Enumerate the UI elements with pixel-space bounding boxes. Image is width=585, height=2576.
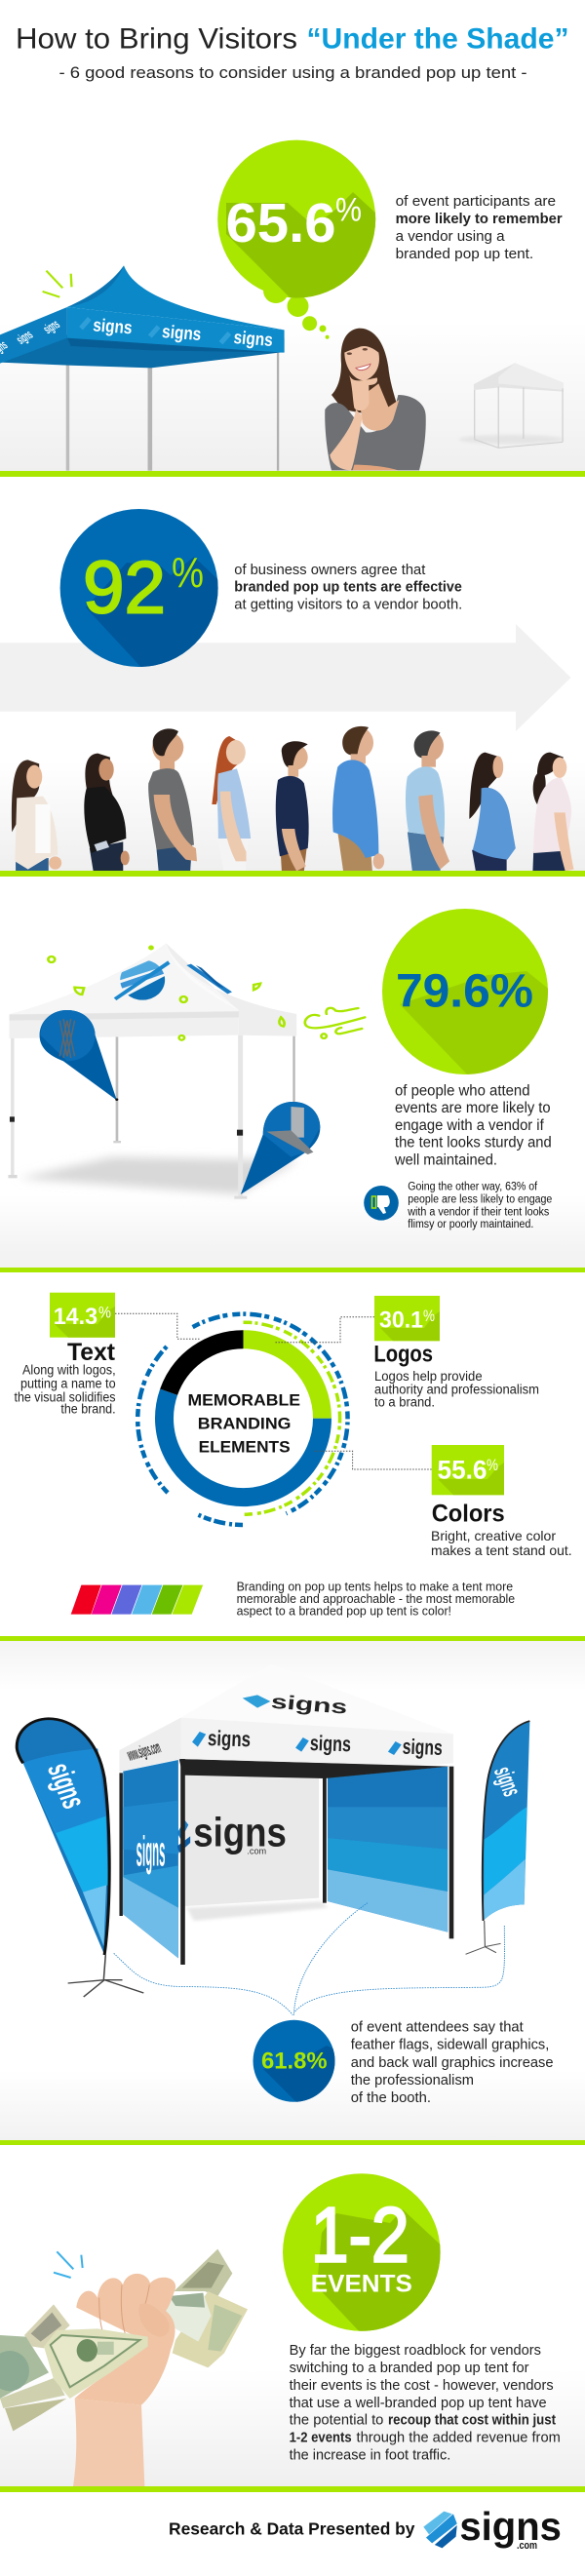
stat description: the tent looks sturdy and xyxy=(395,1135,552,1151)
stat bubble: 65.6%: % xyxy=(335,191,362,228)
stat description: of event attendees say that xyxy=(351,2018,525,2035)
callout: text xyxy=(14,1293,116,1416)
feather flag left: signs xyxy=(40,1759,94,1813)
title: “Under the Shade” xyxy=(306,23,569,55)
tent logos: signs xyxy=(92,316,134,338)
tent logos xyxy=(0,316,274,358)
stat description xyxy=(396,193,563,262)
falling leaves xyxy=(48,947,327,1040)
stat circle: 1-2 events: EVENTS xyxy=(311,2271,412,2298)
callout: text: the brand. xyxy=(60,1401,116,1416)
callout: text: Text xyxy=(67,1339,116,1366)
person 6 xyxy=(332,726,384,871)
footer credit xyxy=(169,2505,562,2552)
callout: colors: Colors xyxy=(432,1501,505,1528)
donut centre label: MEMORABLE xyxy=(187,1391,300,1410)
dotted leader lines xyxy=(115,1313,432,1469)
stat circle: 1-2 events: 1-2 xyxy=(311,2191,410,2278)
stat bubble: 65.6% xyxy=(217,140,390,339)
stat description: well maintained. xyxy=(394,1151,497,1168)
stat description: of event participants are xyxy=(396,193,556,210)
tent poles xyxy=(119,1759,453,1965)
tent logos: signs xyxy=(161,322,202,345)
divider xyxy=(0,871,585,877)
branding summary xyxy=(237,1580,515,1619)
stat description: of people who attend xyxy=(395,1082,530,1099)
branded tent with walls: signs xyxy=(136,1827,166,1875)
stat bubble: 65.6%: 65.6 xyxy=(226,192,335,254)
person 7 xyxy=(406,730,449,871)
canopy: signs xyxy=(208,1727,251,1752)
callout: colors: % xyxy=(487,1456,498,1474)
cost paragraph: the potential to xyxy=(290,2412,383,2429)
note: going the other way xyxy=(407,1182,552,1230)
cost paragraph: recoup that cost within just xyxy=(388,2412,556,2429)
donut centre label xyxy=(187,1391,300,1457)
back wall logo: signs xyxy=(193,1809,287,1855)
note: going the other way: with a vendor if their tent looks xyxy=(407,1206,550,1218)
cost paragraph: 1-2 events xyxy=(290,2429,352,2445)
callout: logos xyxy=(373,1296,539,1409)
footer credit: Research & Data Presented by xyxy=(169,2518,415,2538)
donut centre label: BRANDING xyxy=(198,1415,291,1433)
panel: 61.8% professionalism xyxy=(17,1664,554,2106)
pin: frame detail xyxy=(40,1010,118,1101)
queue of people xyxy=(12,726,574,871)
feather flag right xyxy=(466,1721,529,1954)
icon: thumbs down xyxy=(364,1186,399,1221)
back wall logo: .com xyxy=(247,1847,266,1856)
stat description: the professionalism xyxy=(351,2072,474,2088)
divider xyxy=(0,1268,585,1272)
callout: colors: 55.6 xyxy=(437,1456,488,1485)
divider xyxy=(0,2486,585,2492)
donut centre label: ELEMENTS xyxy=(199,1438,291,1457)
grey arrow xyxy=(0,624,571,731)
right side wall xyxy=(328,1767,448,1932)
callout: logos: % xyxy=(423,1307,435,1325)
stat circle: 61.8%: 61.8% xyxy=(261,2049,328,2075)
blue branded tent xyxy=(0,265,285,471)
tent logos: signs xyxy=(233,328,274,351)
stat description xyxy=(351,2018,554,2106)
stat description xyxy=(234,562,462,612)
note: going the other way: Going the other way, 63% of xyxy=(408,1182,538,1193)
divider xyxy=(0,2140,585,2145)
plain grey tent xyxy=(459,363,564,448)
person 2 xyxy=(84,754,130,871)
stat description: branded pop up tent. xyxy=(396,246,533,262)
panel: 79.6% sturdy tent xyxy=(8,909,556,1230)
person 1 xyxy=(12,760,61,871)
subtitle: - 6 good reasons to consider using a branded pop up tent - xyxy=(58,63,526,82)
canopy xyxy=(119,1664,453,1778)
person 5 xyxy=(276,741,309,871)
branding summary: memorable and approachable - the most memorable xyxy=(237,1591,515,1606)
tent logos: signs xyxy=(14,328,36,347)
title: How to Bring Visitors xyxy=(16,23,297,55)
person 9 xyxy=(532,753,574,871)
title xyxy=(16,23,569,55)
wind curls xyxy=(305,1008,365,1034)
branded tent with walls xyxy=(17,1664,529,2015)
callout: text: Along with logos, xyxy=(22,1362,116,1377)
tent logos: signs xyxy=(41,317,63,337)
panel: 65.6% remember a vendor xyxy=(0,140,564,471)
canopy: signs xyxy=(309,1732,351,1757)
divider xyxy=(0,1636,585,1641)
note: going the other way: people are less likely to engage xyxy=(408,1194,552,1206)
callout: text: the visual solidifies xyxy=(14,1389,116,1404)
stat description: events are more likely to xyxy=(395,1100,551,1116)
cost paragraph: through the added revenue from xyxy=(357,2429,561,2445)
divider xyxy=(0,471,585,477)
feather flag left xyxy=(17,1719,143,1997)
cost paragraph: switching to a branded pop up tent for xyxy=(290,2360,529,2376)
stat circle: 61.8% xyxy=(254,2020,335,2102)
feather flag right: signs xyxy=(488,1764,526,1800)
pin: base detail xyxy=(241,1102,320,1194)
callout: colors: Bright, creative color xyxy=(431,1528,556,1543)
callout: logos: Logos help provide xyxy=(374,1369,483,1384)
stat description: of the booth. xyxy=(351,2089,431,2106)
branding summary: Branding on pop up tents helps to make a tent more xyxy=(237,1580,513,1594)
back wall xyxy=(184,1775,319,1906)
hand gripping money xyxy=(0,2249,248,2486)
person 3 xyxy=(148,728,197,871)
stat circle: 92% xyxy=(60,509,218,667)
colour swatches xyxy=(71,1585,203,1615)
branding summary: aspect to a branded pop up tent is color! xyxy=(237,1604,451,1619)
back wall logo xyxy=(177,1809,287,1856)
cost paragraph: that use a well-branded pop up tent have xyxy=(290,2395,547,2411)
stat description: at getting visitors to a vendor booth. xyxy=(234,596,462,612)
stat description: of business owners agree that xyxy=(234,562,426,578)
sparkle lines xyxy=(54,2251,83,2278)
callout: logos: to a brand. xyxy=(374,1394,435,1409)
callout: logos: authority and professionalism xyxy=(374,1382,539,1396)
stat circle: 92%: 92 xyxy=(83,546,166,629)
stat circle: 92%: % xyxy=(172,549,204,597)
stat circle: 1-2 events xyxy=(283,2173,448,2335)
cost paragraph: their events is the cost - however, vendors xyxy=(290,2377,554,2394)
note: going the other way: flimsy or poorly maintained. xyxy=(408,1219,533,1230)
stat description: a vendor using a xyxy=(396,228,505,245)
callout: logos: Logos xyxy=(373,1342,433,1368)
signs.com logo: signs xyxy=(459,2505,562,2549)
stat description: branded pop up tents are effective xyxy=(234,579,462,596)
white tent with callout pins xyxy=(8,943,365,1199)
callout: logos: 30.1 xyxy=(379,1308,423,1334)
stat description: and back wall graphics increase xyxy=(351,2054,554,2071)
canopy: signs xyxy=(270,1691,348,1718)
stat description: engage with a vendor if xyxy=(395,1117,544,1134)
panel: memorable branding elements xyxy=(14,1293,572,1619)
sparkle lines xyxy=(43,271,71,297)
thinking woman xyxy=(325,329,426,470)
callout: colors: makes a tent stand out. xyxy=(431,1542,572,1558)
signs.com logo xyxy=(423,2505,562,2552)
roof logo stripes xyxy=(113,960,232,1000)
callout: text: putting a name to xyxy=(20,1376,116,1390)
stat description xyxy=(394,1082,552,1168)
callout: text: 14.3 xyxy=(54,1304,98,1330)
panel: 1-2 events xyxy=(0,2173,561,2486)
callout: text: % xyxy=(98,1303,111,1322)
cost paragraph: By far the biggest roadblock for vendors xyxy=(290,2342,541,2359)
cost paragraph: the increase in foot traffic. xyxy=(290,2446,450,2463)
dotted connector lines xyxy=(114,1903,505,2015)
stat circle: 79.6% xyxy=(382,909,556,1077)
panel: 92% effective xyxy=(0,509,574,871)
signs.com logo: .com xyxy=(517,2539,537,2552)
cost paragraph xyxy=(290,2342,561,2463)
donut chart xyxy=(137,1314,348,1525)
person 8 xyxy=(469,753,516,871)
person 4 xyxy=(212,736,251,871)
left side wall xyxy=(123,1760,178,1958)
stat circle: 79.6%: 79.6% xyxy=(396,966,533,1018)
stat description: feather flags, sidewall graphics, xyxy=(351,2037,549,2053)
canopy: www.signs.com xyxy=(124,1737,163,1765)
canopy: signs xyxy=(402,1736,443,1760)
callout: colors xyxy=(431,1445,572,1558)
stat description: more likely to remember xyxy=(396,211,563,227)
